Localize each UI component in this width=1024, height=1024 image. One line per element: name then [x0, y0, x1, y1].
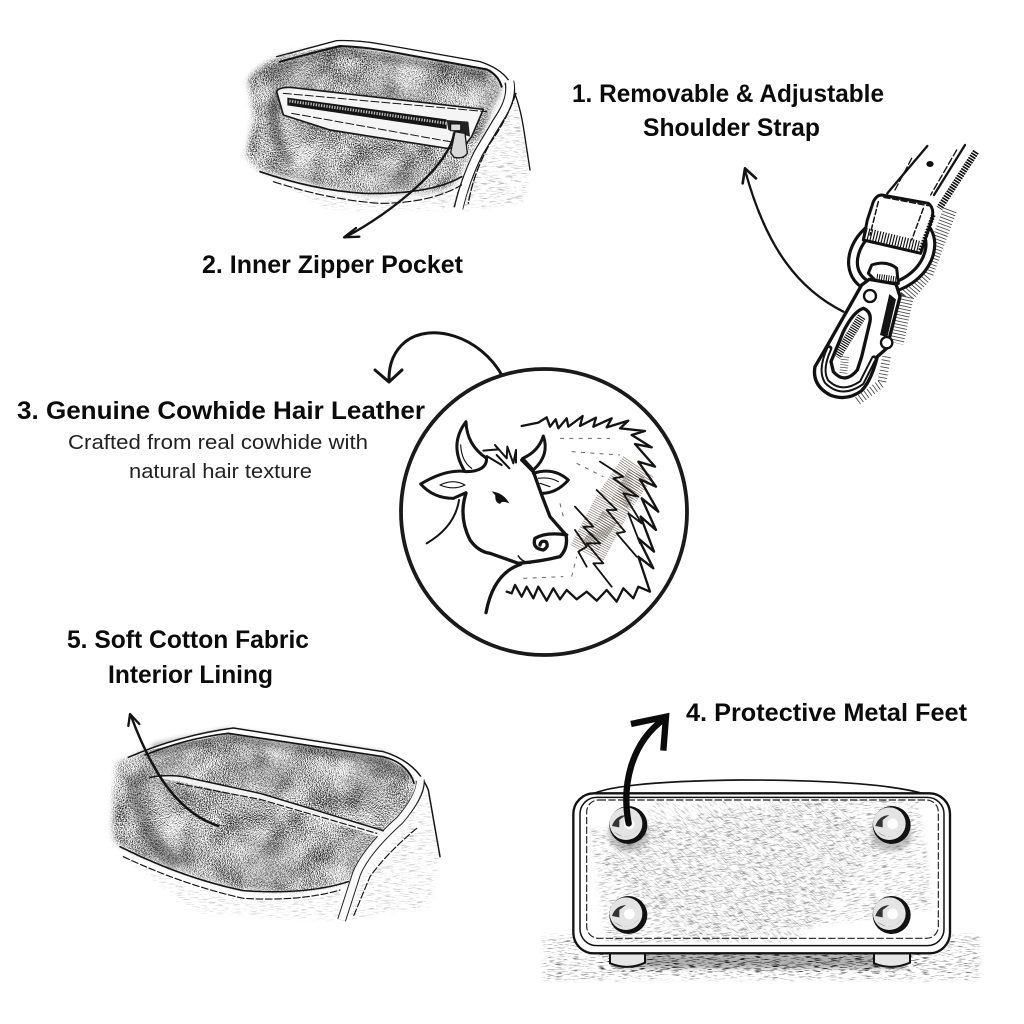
icon: cow head with hair [421, 416, 658, 613]
bottom stitched edge [120, 847, 348, 899]
arrow: to label 5 [128, 714, 218, 826]
bag base [572, 779, 952, 954]
ground shadow [543, 935, 980, 980]
strap keeper [863, 195, 933, 253]
zipper pocket welt [277, 87, 487, 158]
arrow: to label 2 [344, 133, 454, 237]
text block: cowhide description [68, 432, 368, 483]
heading: 3. Genuine Cowhide Hair Leather: 3. Genuine Cowhide Hair Leather [17, 397, 425, 425]
heading: 1. Removable & Adjustable Shoulder Strap [572, 80, 884, 142]
seam [150, 776, 383, 837]
panel: protective metal feet illustration [543, 713, 980, 995]
strap [857, 145, 976, 402]
panel: shoulder strap clasp illustration [743, 145, 976, 402]
snap hook [814, 263, 900, 398]
bag feet underside [610, 952, 910, 967]
arrow: from cowhide badge to label 3 [375, 333, 503, 382]
heading: 1. Removable & Adjustable Shoulder Strap: 1. Removable & Adjustable [572, 80, 884, 108]
heading: 2. Inner Zipper Pocket: 2. Inner Zipper Pocket [202, 251, 464, 279]
rim [127, 727, 440, 920]
heading: 5. Soft Cotton Fabric Interior Lining: Interior Lining [108, 661, 273, 689]
text block: cowhide description: Crafted from real cowhide with [68, 432, 368, 454]
heading: 1. Removable & Adjustable Shoulder Strap: Shoulder Strap [643, 114, 820, 142]
panel: cotton lining illustration [113, 714, 440, 920]
heading: 5. Soft Cotton Fabric Interior Lining [67, 626, 309, 689]
D-ring [839, 203, 944, 303]
badge circle [401, 369, 687, 655]
panel: cowhide badge [401, 369, 687, 655]
heading: 4. Protective Metal Feet: 4. Protective Metal Feet [686, 699, 968, 727]
cow face [421, 422, 568, 563]
panel: inner zipper pocket illustration [247, 41, 530, 237]
metal rivets [608, 806, 912, 934]
text block: cowhide description: natural hair texture [129, 461, 312, 483]
arrow: to label 1 [743, 168, 843, 312]
arrow: to label 4 [626, 717, 666, 823]
leather rim [260, 80, 516, 210]
heading: 5. Soft Cotton Fabric Interior Lining: 5. Soft Cotton Fabric [67, 626, 309, 654]
